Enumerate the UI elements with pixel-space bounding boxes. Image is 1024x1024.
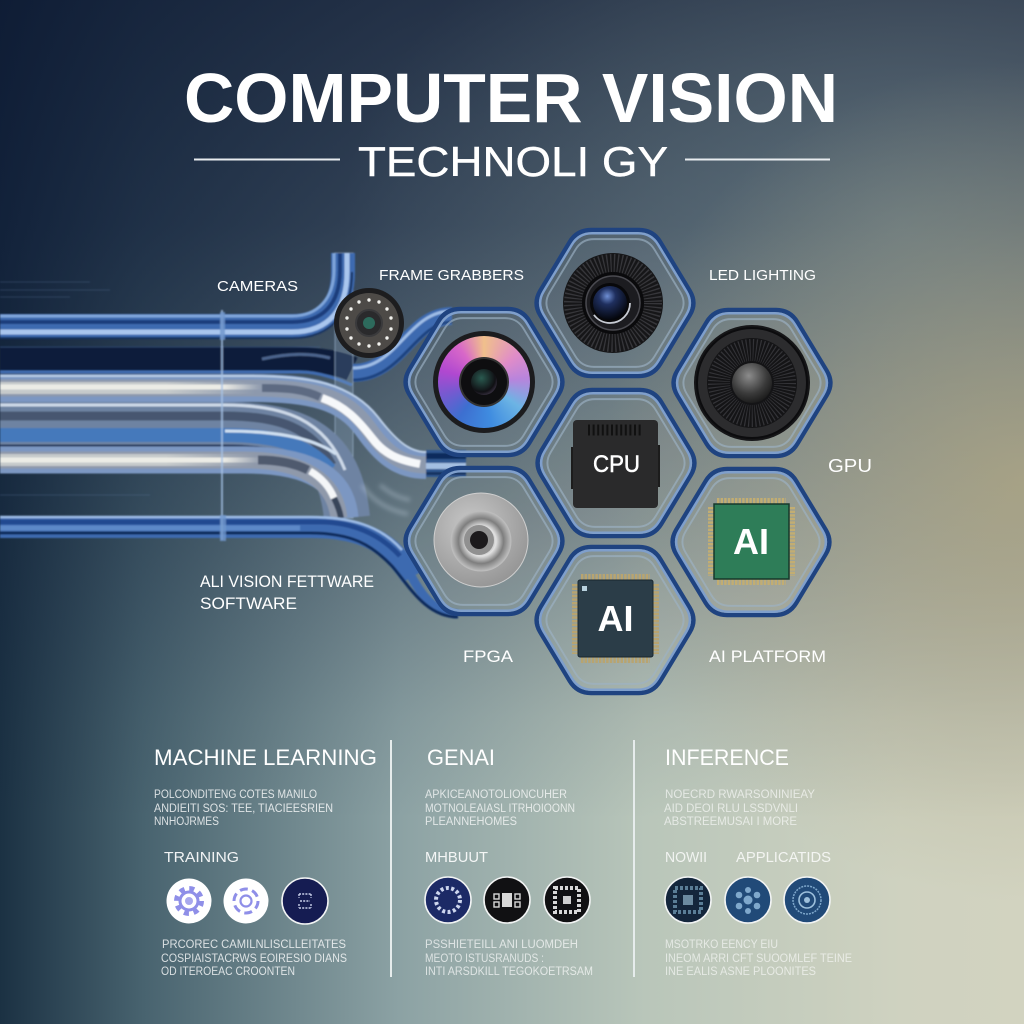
description: PLEANNEHOMES: [425, 816, 517, 828]
description: NOECRD RWARSONINIEAY: [665, 789, 815, 801]
label: cameras: CAMERAS: [217, 278, 298, 295]
label: frame grabbers: FRAME GRABBERS: [379, 267, 524, 284]
footnote: MSOTRKO EENCY EIU: [665, 939, 778, 951]
icon: silver camera: [434, 493, 528, 587]
title: COMPUTER VISION: [184, 59, 838, 137]
label: AI platform: AI PLATFORM: [709, 647, 826, 666]
divider: [633, 740, 635, 977]
description: ANDIEITI SOS: TEE, TIACIEESRIEN: [154, 803, 333, 815]
hexagon: dark AI chip: [537, 547, 693, 693]
chip: CPU: [571, 420, 660, 508]
label: AI vision software: ALI VISION FETTWARE: [200, 572, 374, 591]
label: LED lighting: LED LIGHTING: [709, 267, 816, 284]
tube reflection: [362, 485, 410, 514]
hexagon: green AI chip: [673, 469, 829, 615]
footnote: PSSHIETEILL ANI LUOMDEH: [425, 939, 578, 951]
description: APKICEANOTOLIONCUHER: [425, 789, 567, 801]
icon: top camera lens: [563, 253, 663, 353]
tube: short link into hexagons: [426, 450, 466, 477]
subheading: APPLICATIDS: [736, 849, 831, 866]
description: NNHOJRMES: [154, 816, 219, 828]
tube: middle blue group: [0, 405, 347, 518]
chip: green AI: [711, 501, 792, 582]
description: MOTNOLEAIASL ITRHOIOONN: [425, 803, 575, 815]
hexagon: top camera: [537, 230, 693, 376]
tube: faint streaks: [0, 282, 150, 495]
chip: dark AI: [575, 577, 656, 660]
icon: cluster: [725, 877, 771, 923]
label: GPU: GPU: [828, 456, 872, 476]
tube: bottom tube to hexagon: [0, 517, 458, 617]
tube network: [0, 253, 466, 617]
hexagon: silver camera: [406, 468, 562, 614]
label: FPGA: FPGA: [463, 647, 514, 666]
footnote: OD ITEROEAC CROONTEN: [161, 966, 295, 978]
footnote: INE EALIS ASNE PLOONITES: [665, 966, 816, 978]
panel: GenAI: [425, 745, 593, 978]
heading: GENAI: [427, 745, 495, 770]
hexagon: color camera: [406, 309, 562, 455]
icon: black chips: [484, 877, 530, 923]
description: AID DEOI RLU LSSDVNLI: [664, 803, 798, 815]
icon: speaker lens: [694, 325, 810, 441]
label: AI vision software: [200, 572, 374, 613]
icon: color camera lens: [433, 331, 535, 433]
subheading: TRAINING: [164, 849, 239, 866]
tube: camera link to hexagon: [353, 311, 452, 380]
tube: top tube to vertical: [0, 253, 352, 338]
description: [664, 789, 815, 828]
icon: network ring: [425, 877, 471, 923]
icon: circuit board: [665, 877, 711, 923]
tube: dark rear tube: [0, 347, 352, 385]
footnote: INTI ARSDKILL TEGOKOETRSAM: [425, 966, 593, 978]
tube: lower silver: [0, 460, 345, 518]
icon: gear outline: [224, 878, 268, 924]
description: [425, 789, 575, 828]
description: [154, 789, 333, 828]
icon: dark chip: [282, 878, 328, 924]
footnote: [425, 939, 593, 978]
panel: inference: [664, 745, 852, 978]
label: AI vision software: SOFTWARE: [200, 594, 297, 613]
description: ABSTREEMUSAI I MORE: [664, 816, 797, 828]
description: POLCONDITENG COTES MANILO: [154, 789, 317, 801]
chip: CPU: CPU: [593, 451, 640, 478]
footnote: [665, 939, 852, 978]
footnote: INEOM ARRI CFT SUOOMLEF TEINE: [665, 953, 852, 965]
hexagon: CPU: [538, 390, 694, 536]
tube: translucent vertical channel: [335, 253, 353, 518]
subheading: NOWII: [665, 849, 707, 866]
panel: machine learning: [154, 745, 377, 978]
heading: MACHINE LEARNING: [154, 745, 377, 770]
chip: dark AI: AI: [598, 598, 634, 639]
footnote: PRCOREC CAMILNLISCLLEITATES: [162, 939, 346, 951]
hexagon: speaker lens: [674, 310, 830, 456]
icon: black circuit: [544, 877, 590, 923]
tube clamp: [220, 310, 226, 541]
icon: small ring camera: [334, 288, 404, 358]
icon: radar: [784, 877, 830, 923]
footnote: COSPIAISTACRWS EOIRESIO DIANS: [161, 953, 347, 965]
icon: gear: [166, 878, 212, 924]
chip: green AI: AI: [733, 521, 769, 562]
subheading: MHBUUT: [425, 849, 488, 866]
footnote: [161, 939, 347, 978]
footnote: MEOTO ISTUSRANUDS :: [425, 953, 544, 965]
subtitle with rules: TECHNOLI GY: [358, 138, 668, 185]
heading: INFERENCE: [665, 745, 789, 770]
divider: [390, 740, 392, 977]
tube: upper silver: [0, 376, 426, 465]
